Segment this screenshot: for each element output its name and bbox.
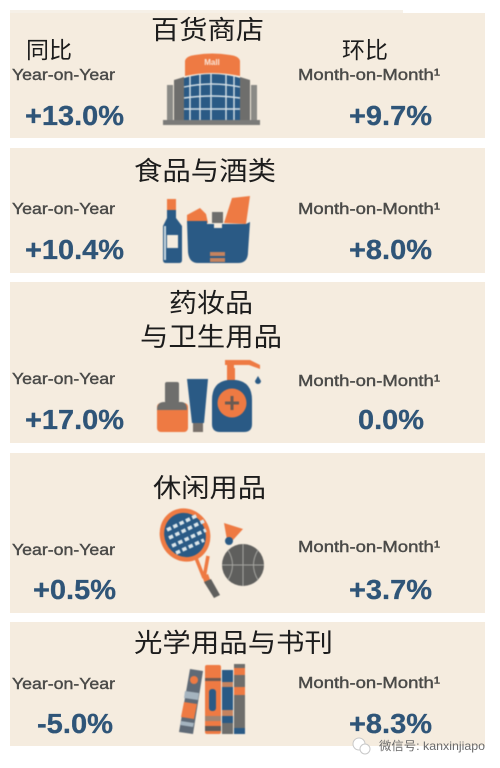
label: month-on-month: Month-on-Month¹ [298,373,440,390]
heading: cosmetics and toiletries: 药妆品 [169,288,253,318]
heading: department stores: 百货商店 [151,15,264,45]
icon: shopping mall [163,54,260,125]
icon: racket, shuttlecock and ball [151,500,264,598]
value: year-on-year: +0.5% [33,574,116,605]
watermark [353,738,485,754]
panel: cosmetics and toiletries [10,282,485,443]
value: year-on-year: +10.4% [25,234,124,265]
label: year-on-year: Year-on-Year [12,676,116,693]
value: month-on-month: +8.0% [349,234,432,265]
heading: cosmetics and toiletries: 与卫生用品 [140,322,282,352]
label: month-on-month: Month-on-Month¹ [298,675,440,692]
label: year-on-year Chinese: 同比 [26,37,72,63]
panel: optical goods and books [10,622,485,746]
icon: books [179,664,245,734]
value: month-on-month: +8.3% [349,708,432,739]
icon: shopping mall: Mall [204,58,220,67]
label: year-on-year: Year-on-Year [12,201,116,218]
value: month-on-month: 0.0% [358,404,424,435]
icon: cosmetics bottles [157,360,261,432]
label: year-on-year: Year-on-Year [12,67,116,84]
panel: food and alcohol [10,148,485,273]
value: year-on-year: +13.0% [25,100,124,131]
label: month-on-month: Month-on-Month¹ [298,539,440,556]
panel: leisure goods [10,453,485,613]
label: year-on-year: Year-on-Year [12,542,116,559]
heading: cosmetics and toiletries [140,288,282,352]
value: month-on-month: +9.7% [349,100,432,131]
value: year-on-year: -5.0% [37,708,113,739]
heading: optical goods and books: 光学用品与书刊 [134,628,333,658]
panel: department stores [10,10,485,138]
heading: food and alcohol: 食品与酒类 [134,156,276,186]
label: month-on-month Chinese: 环比 [342,37,388,63]
label: month-on-month: Month-on-Month¹ [298,201,440,218]
value: month-on-month: +3.7% [349,574,432,605]
value: year-on-year: +17.0% [25,404,124,435]
label: month-on-month: Month-on-Month¹ [298,67,440,84]
label: year-on-year: Year-on-Year [12,371,116,388]
heading: leisure goods: 休闲用品 [153,473,266,503]
watermark: 微信号: kanxinjiapo [379,739,485,753]
icon: bottle and grocery bag [163,196,250,263]
